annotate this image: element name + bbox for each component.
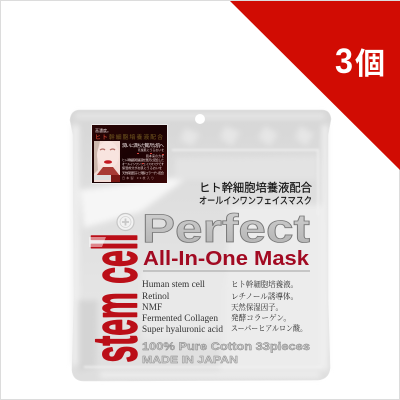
red corner banner bbox=[230, 1, 400, 170]
vertical brand: stem cell bbox=[82, 234, 150, 362]
card body copy: 乾燥肌にうるおいを bbox=[138, 148, 164, 152]
product pouch bbox=[70, 110, 331, 381]
hang hole bbox=[195, 114, 205, 124]
ingredient list: English: Retinol bbox=[142, 292, 170, 302]
card body copy: 肌本来の力を bbox=[146, 154, 164, 158]
card body copy: 日本製 33枚入り bbox=[122, 175, 154, 180]
ingredient list: English: NMF bbox=[142, 303, 162, 313]
title: All-In-One Mask: All-In-One Mask bbox=[143, 248, 310, 270]
Japanese subtitle bbox=[199, 180, 312, 207]
product pouch: stem cell bbox=[82, 234, 150, 362]
card heading: ヒト幹細胞培養液配合 bbox=[95, 133, 163, 141]
origin line: MADE IN JAPAN bbox=[142, 354, 238, 366]
ingredient list: English: Human stem cell bbox=[142, 280, 205, 290]
highlight on brand letters bbox=[89, 237, 106, 247]
divider rule bbox=[143, 270, 310, 272]
pouch seam lines bbox=[84, 150, 322, 367]
card body copy: ヒト幹細胞培養液を贅沢に配合した bbox=[122, 157, 164, 162]
Japanese subtitle: オールインワンフェイスマスク bbox=[199, 196, 312, 207]
card body copy: オールインワンフェイスマスクです bbox=[122, 161, 164, 166]
ingredient list: Japanese: 天然保湿因子。 bbox=[231, 302, 283, 312]
card red dots bbox=[137, 153, 164, 164]
Japanese subtitle: ヒト幹細胞培養液配合 bbox=[199, 180, 312, 194]
card body copy: 天然保湿因子と発酵コラーゲン配合 bbox=[122, 170, 164, 175]
banner label: 3個 bbox=[335, 42, 385, 81]
card body copy bbox=[122, 148, 164, 180]
promo card bbox=[92, 124, 168, 184]
ingredient list: Japanese: ヒト幹細胞培養液。 bbox=[231, 279, 298, 289]
ingredient list: English bbox=[142, 280, 223, 335]
ingredient list: Japanese: スーパーヒアルロン酸。 bbox=[231, 323, 307, 333]
card heading: 潤いに満ちた贅沢な肌へ bbox=[122, 142, 164, 149]
banner label: 3個: 3 bbox=[335, 42, 353, 81]
card heading: 高濃度。 bbox=[95, 127, 111, 133]
ingredient list: Japanese bbox=[231, 279, 307, 333]
ingredient list: Japanese: 発酵コラーゲン。 bbox=[231, 312, 291, 322]
logo seal bbox=[117, 214, 134, 230]
banner label: 3個: 個 bbox=[355, 48, 385, 81]
ingredient list: Japanese: レチノール誘導体。 bbox=[231, 291, 298, 301]
card heading bbox=[95, 127, 164, 149]
card portrait bbox=[94, 141, 120, 182]
title: Perfect: Perfect bbox=[142, 207, 310, 251]
ingredient list: English: Fermented Collagen bbox=[142, 314, 218, 324]
pouch folds and highlights bbox=[72, 113, 328, 378]
card body copy: 保湿成分がお肌にうるおいを bbox=[122, 165, 162, 170]
material line: 100% Pure Cotton 33pieces bbox=[142, 341, 310, 353]
ingredient list: English: Super hyaluronic acid bbox=[142, 325, 223, 335]
